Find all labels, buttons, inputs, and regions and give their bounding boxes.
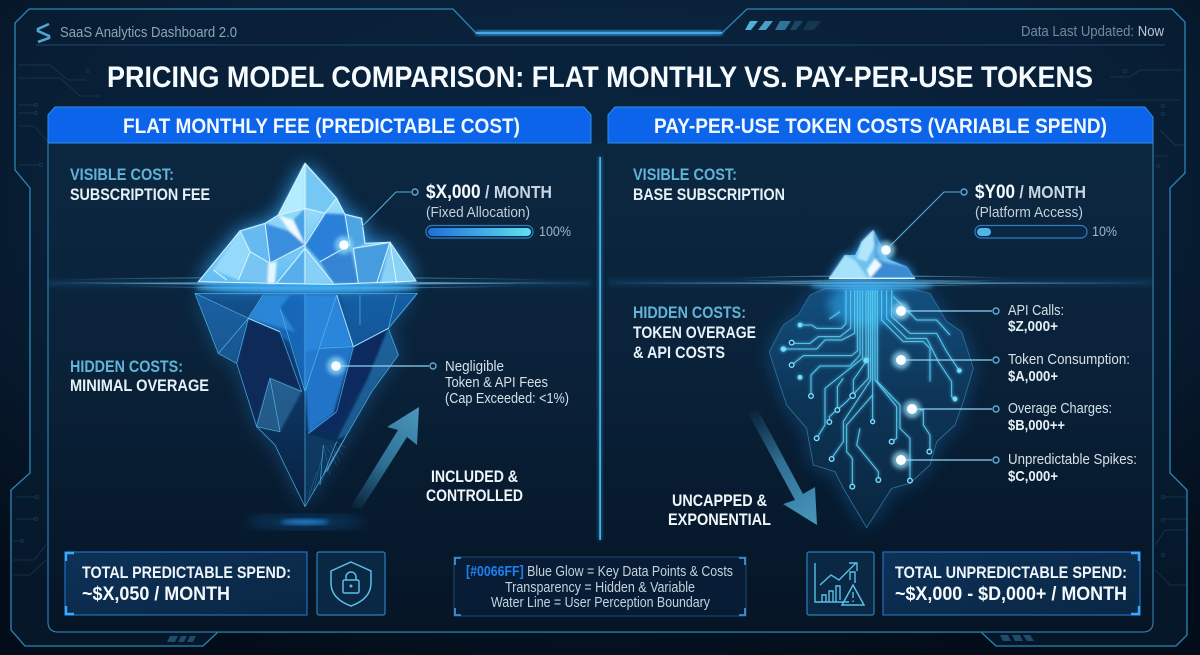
callout: monthly fee: $X,000 / MONTH (426, 182, 552, 203)
legend box (454, 557, 746, 616)
callout: negligible fees: Token & API Fees (445, 374, 548, 391)
top chevrons (167, 21, 1034, 642)
dashboard name: SaaS Analytics Dashboard 2.0 (60, 24, 237, 41)
callout: base fee: (Platform Access) (975, 204, 1083, 221)
hidden costs label: TOKEN OVERAGE (633, 324, 756, 342)
visible cost label: VISIBLE COST: (70, 166, 174, 184)
progress bar 10%: 10% (1092, 223, 1117, 239)
total predictable spend box: ~$X,050 / MONTH (82, 584, 230, 605)
water line (608, 276, 1153, 290)
callout: negligible fees: Negligible (445, 358, 504, 375)
cost callouts: API Calls: (1008, 302, 1064, 319)
iceberg: underwater circuit (769, 283, 973, 528)
cost callouts: $B,000++ (1008, 417, 1065, 434)
callout: monthly fee: (Fixed Allocation) (426, 204, 530, 221)
progress bar 100%: 100% (539, 223, 571, 239)
legend box: Water Line = User Perception Boundary (491, 594, 710, 611)
arrow: up (350, 407, 419, 508)
icon: rising chart with warning (807, 552, 874, 615)
hidden costs label (70, 358, 209, 395)
glow beneath iceberg (245, 517, 365, 527)
legend box: Transparency = Hidden & Variable (505, 579, 695, 596)
hidden costs label: HIDDEN COSTS: (70, 358, 183, 376)
total unpredictable spend box (883, 552, 1140, 615)
total predictable spend box (65, 552, 307, 615)
label: included and controlled: CONTROLLED (426, 487, 523, 505)
callout: monthly fee (335, 182, 552, 254)
cost callouts: $Z,000+ (1008, 318, 1058, 335)
callout: negligible fees (327, 357, 569, 407)
cost callouts (892, 302, 1137, 485)
total predictable spend box: TOTAL PREDICTABLE SPEND: (82, 563, 291, 582)
cost callouts: Overage Charges: (1008, 400, 1112, 417)
icon: shield lock (317, 552, 385, 615)
panel header: pay-per-use (608, 107, 1153, 143)
cost callouts: $C,000+ (1008, 468, 1058, 485)
hidden costs label: MINIMAL OVERAGE (70, 377, 209, 395)
panel: pay-per-use (600, 107, 1153, 632)
total unpredictable spend box: TOTAL UNPREDICTABLE SPEND: (895, 563, 1127, 582)
label: uncapped and exponential: EXPONENTIAL (668, 511, 771, 529)
visible cost label: BASE SUBSCRIPTION (633, 186, 785, 204)
panel header: pay-per-use: PAY-PER-USE TOKEN COSTS (VARIABLE SPEND) (654, 115, 1107, 138)
data updated label: Data Last Updated: Now (1021, 24, 1164, 40)
panel outline (48, 143, 1153, 632)
decorative circuit traces (13, 65, 1186, 585)
callout: negligible fees: (Cap Exceeded: <1%) (445, 390, 569, 407)
callout: base fee: $Y00 / MONTH (975, 182, 1086, 203)
arrow: down (748, 408, 817, 525)
hidden costs label: & API COSTS (633, 344, 725, 362)
visible cost label: SUBSCRIPTION FEE (70, 186, 210, 204)
visible cost label: VISIBLE COST: (633, 166, 737, 184)
label: included and controlled (426, 468, 523, 505)
total unpredictable spend box: ~$X,000 - $D,000+ / MONTH (895, 584, 1127, 605)
dashboard logo (38, 24, 49, 42)
cost callouts: $A,000+ (1008, 368, 1058, 385)
cost callouts: Token Consumption: (1008, 351, 1130, 368)
iceberg: underwater (195, 293, 417, 507)
panel: flat monthly fee (48, 107, 600, 632)
label: included and controlled: INCLUDED & (431, 468, 518, 486)
progress bar 100% (426, 223, 571, 239)
hidden costs label: HIDDEN COSTS: (633, 304, 746, 322)
center divider (598, 157, 602, 540)
hidden costs label (633, 304, 756, 362)
iceberg: above water tip (829, 230, 915, 278)
panel header: flat: FLAT MONTHLY FEE (PREDICTABLE COST) (123, 115, 520, 138)
cost callouts: Unpredictable Spikes: (1008, 451, 1137, 468)
visible cost label (70, 166, 210, 204)
visible cost label (633, 166, 785, 204)
iceberg: above water (198, 163, 416, 284)
callout: base fee (877, 182, 1086, 259)
progress bar 10% (975, 223, 1117, 239)
water line (48, 278, 591, 293)
label: uncapped and exponential (668, 492, 771, 529)
legend box: [#0066FF] Blue Glow = Key Data Points & Costs (466, 563, 733, 580)
title: PRICING MODEL COMPARISON: FLAT MONTHLY VS. PAY-PER-USE TOKENS (107, 61, 1093, 94)
panel header: flat (48, 107, 591, 143)
label: uncapped and exponential: UNCAPPED & (672, 492, 767, 510)
